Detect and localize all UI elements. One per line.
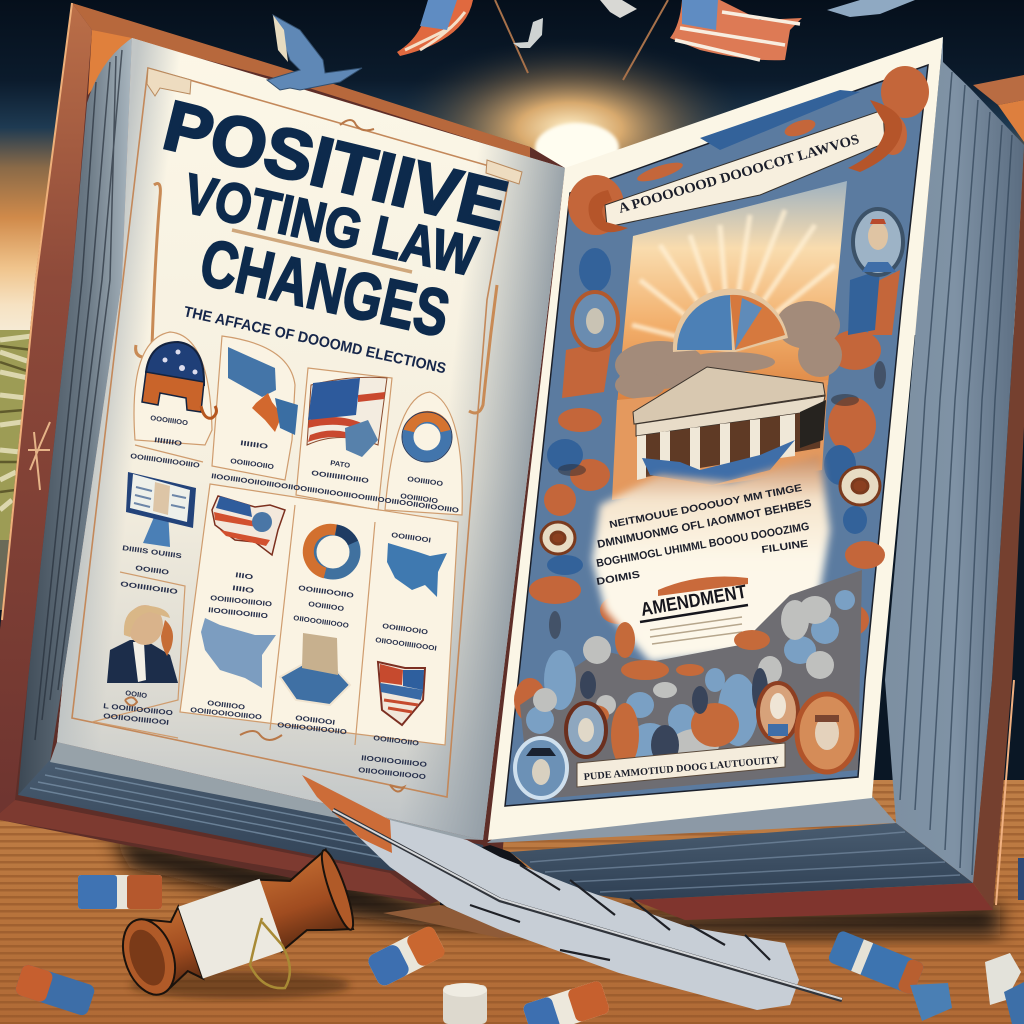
border ornaments: blue foliage [547,90,880,575]
text block: small panel captions: OOOIIIIOO [150,415,189,427]
text block: small panel captions: OOIIIOOI [295,715,335,727]
icon: dove top right [827,0,915,17]
right wooden end [255,848,359,953]
cover: bottom right band [633,883,993,920]
heading: title: VOTING LAW [178,161,483,288]
panel: left page [57,38,565,840]
illustration: classical building [633,367,826,485]
text block: small panel captions: OOIIIIOOIIIOIO [210,595,273,609]
medallion: upper left [572,292,618,350]
table: wooden desk [0,780,1024,1024]
book: gutter shadow [440,845,570,905]
left wooden end [114,906,203,1002]
illustration: semicircular fan [673,289,788,352]
ornament: top left corner [147,68,191,96]
icon: capsule bottom right [827,930,925,996]
icon: state map blue and orange [228,347,298,435]
cover: knot ornament on spine [28,422,50,490]
text block: small panel captions: OOIIIIOO [207,700,246,712]
scroll body rotated along its axis [112,848,359,1003]
text block: small panel captions: PATO [330,460,351,470]
text block: small panel captions: OIIOOOIIIIOOO [293,615,350,630]
icon: white capsule bottom [443,983,487,1024]
text block: small panel captions: OOIIIIOO [407,476,444,488]
icon: flag top left [397,0,473,56]
heading: title [156,86,515,351]
feather: lower plank shadow [383,905,520,938]
gold ring [250,918,290,988]
icon: setting sun [535,123,619,173]
feather: dark barbs [470,865,770,960]
icon: white rock and capsule right [985,953,1024,1024]
icon: dove far top [600,0,637,18]
text block: small panel captions: OOIIIIIOIIIIOOIIIO [130,453,201,470]
cover: left spine strip [0,3,92,813]
book: lower left page edges [18,742,490,880]
text block: small panel captions: OIIOOOIIIIIOOOI [375,637,437,653]
ornament: right vine scroll [469,285,497,413]
text block: small panel captions: DIIIIIS OUIIIIS [122,545,183,560]
icon: capsule piece [910,983,952,1021]
panel: infographic grid on the left page [92,332,462,745]
text block: small panel captions: IIOOIIIOOIIIIO [208,607,269,620]
heading: amendment: AMENDMENT [639,582,749,621]
illustration: clouds [615,301,842,399]
medallion: lower right [758,683,798,741]
text block: small panel captions: IIOOIIIIOOIIOIIIOOIIOOIIIIOIIOOIIIOOIIIIIOOIIIOOIIOIIOOIIIO [211,473,460,515]
medallion: lower left corner [515,738,567,798]
panel: decorated border [505,65,929,806]
cover: inner orange lining [88,30,132,95]
text block: small panel captions: OOIIO [125,690,148,700]
icon: flagpole one [495,0,528,73]
text block: main paragraph: NEITMOUUE DOOOUOY MM TIMGE [608,483,803,531]
icon: capsule bottom middle [522,980,611,1024]
chart: donut two [308,529,355,574]
background: rolling hills [0,330,60,610]
text block: small panel captions: OOIIIIO [135,565,170,577]
icon: US map with flag stripes [212,496,285,555]
icon: capsule bottom left [14,963,96,1017]
icon: capsule center [366,924,447,988]
feather: vanes [302,775,799,1010]
icon: dove on the book [267,15,362,90]
bunting on the building steps [642,440,795,485]
illustration: sky with radiating sunrays [617,181,847,405]
icon: scroll with wooden ends [112,848,359,1003]
text block: small panel captions: IIIIIIO [240,440,269,451]
icon: open book on a stand [126,472,196,547]
heading: title: CHANGES [194,224,456,351]
banner: top ribbon with title: A POOOOOOD DOOOCOT LAWVOS [617,132,861,217]
icon: pale US map [201,618,276,688]
banner: bottom ribbon: PUDE AMMOTIUD DOOG LAUTUOUITY [583,755,780,783]
icon: quill feather [302,775,842,1010]
icon: portrait of a man in a suit [107,605,178,683]
ornament: left vine scroll [136,184,160,357]
feather: orange tip [302,775,392,853]
icon: blue US map [387,543,447,597]
icon: flag top center [670,0,802,60]
icon: tiny capsule right edge [1018,858,1024,900]
book: lower right page edges [487,796,973,900]
icon: flag shield [378,662,425,725]
icon: ballot box hexagon [280,633,350,705]
text block: small panel captions [103,415,460,781]
ornament: top right corner [486,160,522,184]
text block: small panel captions: IIIIIIIO [154,437,183,448]
text block: small panel captions: OOIIIIOIO [400,493,439,505]
text block: small panel captions: OOIIIOOIIO [230,458,275,471]
text block: small panel captions: OOIIOOIIIIIOOI [103,713,169,727]
text block: main paragraph [595,483,813,588]
text block: small panel captions: OIIOOIIIOIIOOO [358,767,427,781]
background: glow around the sun [385,38,755,218]
text block: small panel captions: OOIIIOOIIO [373,735,420,748]
text block: small panel captions: OOIIIIIOIIIO [120,581,179,596]
background: dusk sky [0,0,1024,335]
ribbon scroll: left [588,190,628,232]
illustration: portrait medallions [515,209,903,798]
icon: small dove top [513,18,543,48]
text block: small panel captions: OOIIIOOIIIOOIIO [277,722,348,736]
border ornaments: orange leaves [514,66,929,757]
medallion: lower middle [566,703,606,757]
icon: elephant party symbol [142,342,216,418]
ornaments: spiral scrolls [541,467,880,554]
feather: shaft [333,810,842,1000]
banner: top ribbon with title [588,100,902,232]
illustration: crowd of people [520,570,862,800]
banner: bottom ribbon [577,743,785,787]
text block: small panel captions: OOIIIIIIIOIIIO [311,470,370,485]
medallion: upper right [853,209,903,275]
text block: main paragraph: DOIMIS [596,569,641,588]
text block: small panel captions: OOIIIIOO [308,601,345,613]
text block: small panel captions: OOIIIIOOI [391,532,431,545]
shading along the spine [57,38,565,840]
text block: small panel captions: IIOOIIOOIIIIOO [361,755,428,769]
text block: small panel captions: OOIIIOOIOOIIIOO [190,707,263,722]
border ornaments: dark detail [549,361,886,639]
text block: small panel captions: IIIO [235,572,254,582]
heading: title: POSITIIVE [156,86,515,245]
icon: waving flag [307,377,387,457]
icon: capsule top left [78,875,162,909]
book: right page block [885,37,1024,883]
text block: small panel captions: OOIIIIIOOIIO [298,585,355,600]
heading: amendment [639,576,749,644]
panel: right page [488,37,943,840]
scroll shadow [130,971,350,999]
shading along the left edge [57,38,565,840]
paper wrap [178,879,284,979]
cover: right spine strip [973,145,1024,910]
icon: flagpole two [623,0,668,80]
text block: small panel captions: IIIIO [232,585,255,595]
medallion: far lower right [797,694,857,772]
illustration: orange ground wash [612,380,828,500]
subtitle: THE AFFACE OF DOOOMD ELECTIONS [182,303,448,377]
cover: top strip [72,3,530,158]
cover: top right board [973,75,1024,105]
text block: small panel captions: L OOIIIIOOIIIOO [103,703,174,717]
text block: small panel captions: OOIIIIOOIO [382,623,429,636]
panel: parchment text area [592,455,830,662]
text block: main paragraph: FILUINE [761,538,809,556]
book: left page block [18,38,132,795]
shadow under the book [110,835,1000,935]
chart: donut one [402,412,452,462]
cover: bottom left band [0,800,427,900]
ribbon scroll: right [848,100,902,172]
cover: back fill [0,3,565,905]
text block: main paragraph: BOGHIMOGL UHIMML BOOOU DOOOZIMG [595,521,810,570]
text block: main paragraph: DMNIMUONMG OFL IAOMMOT BEHBES [596,498,813,551]
